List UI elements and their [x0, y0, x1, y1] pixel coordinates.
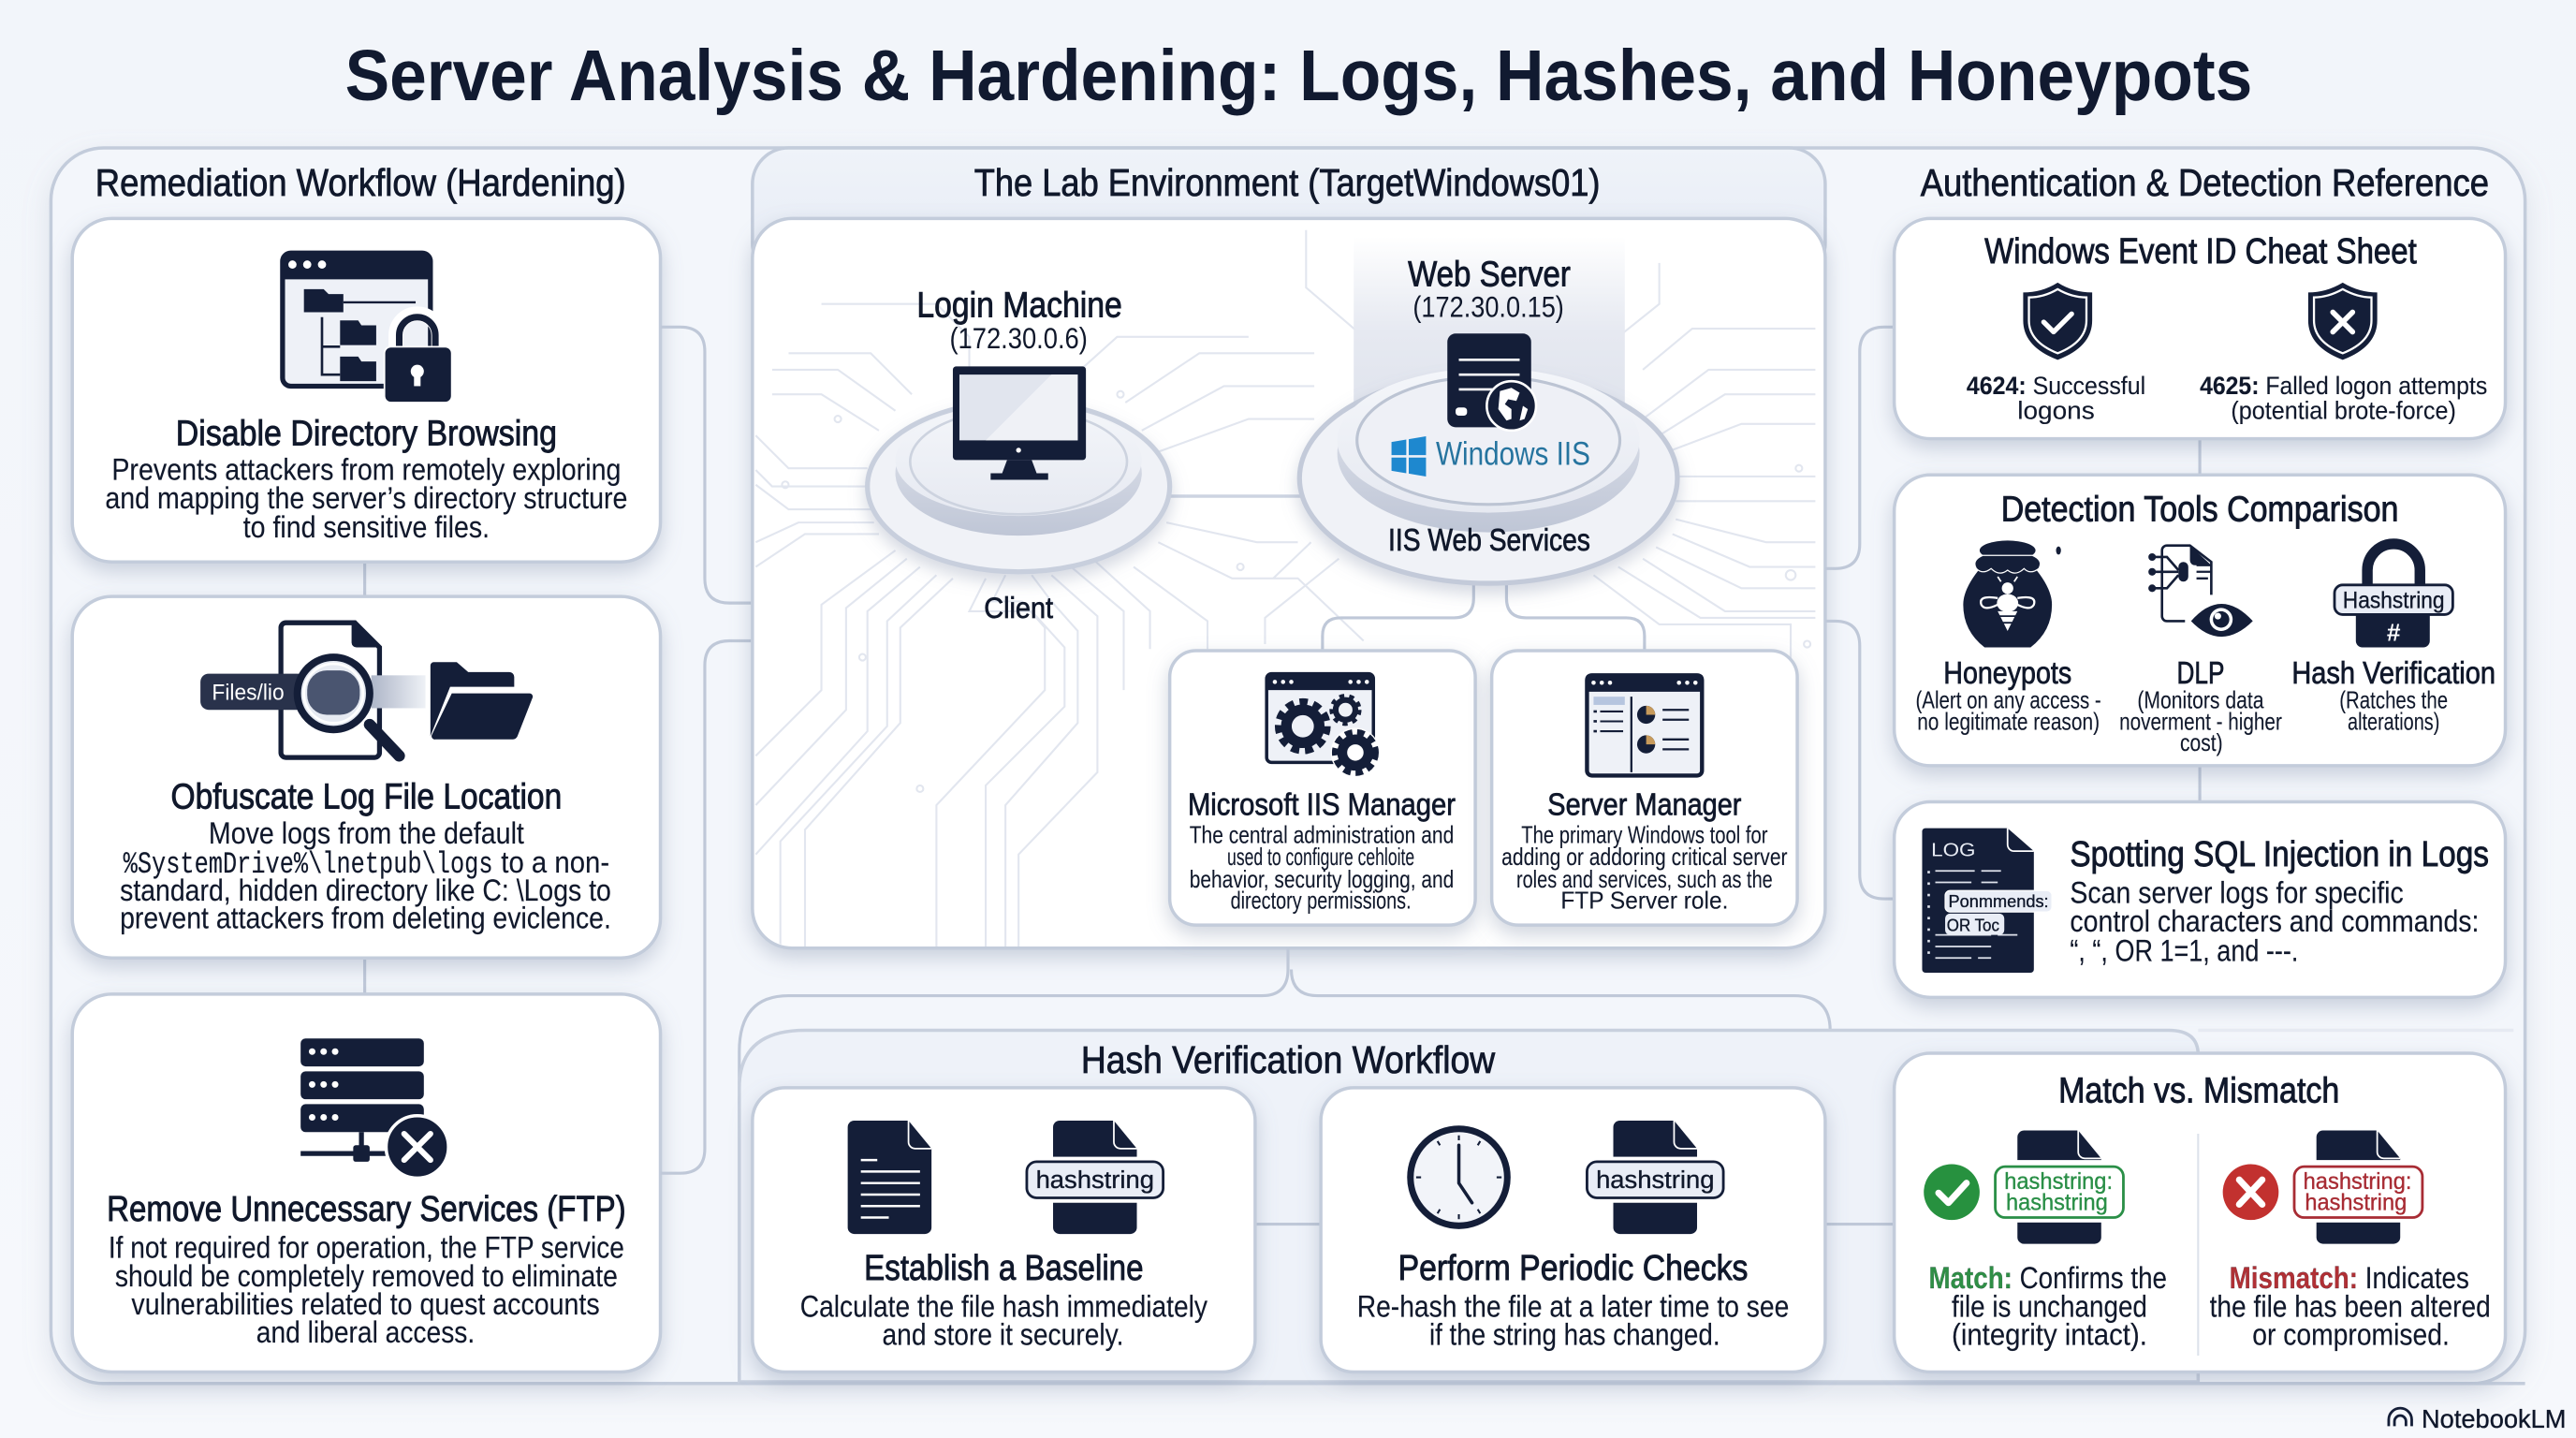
text block — [2070, 875, 2479, 968]
icon: hashstring document: hashstring — [1596, 1166, 1714, 1194]
card: spotting SQL injection — [1895, 801, 2506, 997]
icon: match — [1924, 1131, 2130, 1244]
text block: if the string has changed. — [1429, 1318, 1720, 1352]
card: detection tools comparison — [1895, 475, 2506, 766]
card: remove unnecessary services — [72, 994, 661, 1372]
panel: authentication and detection reference — [1895, 161, 2506, 997]
panel: hash verification workflow — [739, 1030, 2525, 1384]
icon: windows logo and IIS label — [1392, 436, 1590, 477]
text block: “, “, OR 1=1, and ---. — [2070, 934, 2298, 968]
heading: microsoft IIS manager: Microsoft IIS Manager — [1188, 788, 1456, 823]
divider — [2197, 1134, 2199, 1356]
text block — [1501, 822, 1788, 915]
heading: SQL injection: Spotting SQL Injection in Logs — [2070, 834, 2489, 873]
icon: hashstring document — [1584, 1121, 1725, 1234]
text block: The primary Windows tool for — [1521, 822, 1768, 848]
icon: hashstring document: hashstring — [1036, 1166, 1154, 1194]
icon: server stack with x — [300, 1038, 448, 1178]
server glow column — [1354, 237, 1625, 450]
icon: shield x — [2308, 283, 2378, 360]
text: DLP — [2119, 656, 2282, 756]
heading: authentication reference: Authentication & Detection Reference — [1921, 161, 2489, 204]
text: hash verification: Hash Verification — [2291, 656, 2496, 691]
title: Server Analysis & Hardening: Logs, Hashes, and Honeypots — [345, 36, 2252, 116]
text block: Re-hash the file at a later time to see — [1357, 1290, 1789, 1324]
platform: client — [868, 401, 1170, 572]
icon: mismatch — [2223, 1131, 2428, 1244]
text: DLP: noverment - higher — [2119, 709, 2282, 735]
machine label: login machine — [916, 286, 1122, 355]
machine label: web server: Web Server — [1408, 254, 1571, 293]
card: server manager — [1492, 651, 1797, 925]
machine label: web server — [1408, 254, 1571, 324]
text block: and liberal access. — [256, 1315, 475, 1349]
connector: card 1 to card 2 — [364, 562, 366, 596]
text: 4624 — [1967, 371, 2145, 425]
lab card — [753, 218, 1825, 948]
text block: Move logs from the default — [209, 816, 524, 850]
text block: standard, hidden directory like C: \Logs to — [120, 873, 611, 907]
text block — [800, 1290, 1208, 1352]
icon: directory window and lock — [283, 252, 452, 403]
text block — [109, 1231, 624, 1349]
connector: periodic to match — [1825, 1224, 1895, 1225]
text block: FTP Server role. — [1560, 888, 1728, 915]
icon: log file with magnifier and folder: Files/lio — [212, 682, 285, 706]
heading: hash workflow: Hash Verification Workflow — [1081, 1038, 1496, 1081]
text block: directory permissions. — [1231, 888, 1412, 915]
text: 4625: 4625: Falled logon attempts — [2200, 371, 2487, 400]
heading: event ID: Windows Event ID Cheat Sheet — [1984, 231, 2417, 271]
text block: %SystemDrive%\lnetpub\logs — [124, 847, 493, 882]
card: disable directory browsing — [72, 218, 661, 562]
connector: event to detection — [2199, 439, 2201, 475]
logo: NotebookLM: NotebookLM — [2422, 1404, 2566, 1433]
icon: hash lock: Hashstring — [2343, 588, 2445, 613]
text block: Prevents attackers from remotely exploring — [111, 452, 621, 486]
text: match — [1928, 1261, 2167, 1352]
text block: roles and services, such as the — [1516, 867, 1773, 893]
icon: window with gears — [1266, 674, 1380, 777]
text block: Calculate the file hash immediately — [800, 1290, 1208, 1324]
text: mismatch: Mismatch: Indicates — [2230, 1261, 2469, 1295]
connector: card 3 to lab — [661, 640, 753, 1173]
text: DLP: (Monitors data — [2137, 687, 2264, 713]
heading: server manager: Server Manager — [1547, 788, 1741, 823]
panel: remediation workflow — [72, 161, 661, 1372]
heading: establish a baseline: Establish a Baseline — [864, 1248, 1144, 1287]
text block: to a non- — [501, 845, 609, 879]
card: perform periodic checks — [1321, 1088, 1825, 1372]
label: IIS web services: IIS Web Services — [1388, 523, 1590, 558]
heading: remove unnecessary services: Remove Unnecessary Services (FTP) — [107, 1189, 626, 1228]
text: hash verification — [2291, 656, 2496, 735]
text: mismatch: or compromised. — [2252, 1318, 2450, 1352]
connector: lab to SQL card — [1825, 621, 1895, 899]
machine label: web server: (172.30.0.15) — [1412, 290, 1564, 324]
card: match vs mismatch — [1895, 1053, 2506, 1372]
heading: perform periodic checks: Perform Periodic Checks — [1398, 1248, 1748, 1287]
icon: match: hashstring — [2006, 1191, 2108, 1216]
text block — [1357, 1290, 1789, 1352]
text: honeypots: (Alert on any access - — [1915, 687, 2101, 713]
text: DLP: cost) — [2180, 730, 2223, 756]
heading: disable directory browsing: Disable Directory Browsing — [176, 414, 557, 453]
text block: should be completely removed to eliminate — [115, 1259, 618, 1293]
icon: match: hashstring: — [2004, 1169, 2113, 1195]
connector: client to server — [1166, 495, 1301, 497]
text: hash verification: (Ratches the — [2339, 687, 2448, 713]
text: 4625: (potential brote-force) — [2231, 396, 2456, 425]
icon: hashstring document — [1025, 1121, 1164, 1234]
heading: obfuscate log file location: Obfuscate Log File Location — [171, 777, 562, 816]
decorative circuit traces — [755, 230, 1815, 946]
text: 4624: logons — [2017, 396, 2095, 425]
icon: log document — [1922, 829, 2052, 973]
text block: used to configure cehloite — [1227, 844, 1414, 871]
connector: event card to lab — [1825, 327, 1895, 568]
text: match: Match: Confirms the — [1928, 1261, 2167, 1295]
icon: DLP — [2148, 546, 2254, 638]
text block: control characters and commands: — [2070, 904, 2479, 938]
icon: log document: OR Toc — [1947, 915, 1999, 934]
icon: log document: Ponmmends: — [1949, 891, 2049, 911]
text: honeypots: Honeypots — [1943, 656, 2071, 691]
label: client: Client — [984, 591, 1053, 624]
icon: honeypot — [1963, 540, 2061, 648]
icon: dashboard window — [1586, 674, 1704, 775]
text block: prevent attackers from deleting eviclence. — [120, 902, 611, 935]
icon: hash lock — [2334, 544, 2452, 648]
text block — [105, 452, 627, 544]
text block: The central administration and — [1190, 822, 1454, 848]
connector: card 2 to card 3 — [364, 958, 366, 994]
text: mismatch: the file has been altered — [2210, 1290, 2491, 1324]
text: match: (integrity intact). — [1952, 1318, 2147, 1352]
connector: server to tools — [1323, 579, 1645, 651]
text block: adding or addoring critical server — [1501, 844, 1788, 871]
icon: mismatch: hashstring — [2305, 1191, 2407, 1216]
icon: clock — [1411, 1129, 1507, 1225]
icon: server with globe — [1447, 333, 1536, 431]
heading: lab environment: The Lab Environment (TargetWindows01) — [974, 161, 1600, 204]
text: 4625 — [2200, 371, 2487, 425]
platform: server — [1299, 368, 1677, 583]
text block: to find sensitive files. — [243, 510, 490, 544]
heading: remediation: Remediation Workflow (Hardening) — [95, 161, 626, 204]
text block: and mapping the server’s directory structure — [105, 481, 627, 515]
icon: hash lock: # — [2387, 618, 2401, 646]
connector: baseline to periodic — [1255, 1224, 1321, 1225]
text: 4624: 4624: Successful — [1967, 371, 2145, 400]
card: establish a baseline — [753, 1088, 1255, 1372]
machine label: login machine: Login Machine — [916, 286, 1122, 325]
heading: match vs mismatch: Match vs. Mismatch — [2058, 1071, 2339, 1110]
text block: Scan server logs for specific — [2070, 875, 2404, 909]
text: match: file is unchanged — [1952, 1290, 2147, 1324]
icon: mismatch: hashstring: — [2304, 1169, 2411, 1195]
text: mismatch — [2210, 1261, 2491, 1352]
connector: detection to SQL — [2199, 766, 2201, 801]
text: DLP: DLP — [2177, 656, 2224, 691]
panel: lab environment — [753, 148, 1825, 948]
text: honeypots — [1915, 656, 2101, 735]
text block: and store it securely. — [882, 1318, 1123, 1352]
card: windows event ID cheat sheet — [1895, 218, 2506, 439]
icon: log file with magnifier and folder — [200, 623, 533, 757]
connector: card 1 to lab — [661, 327, 753, 603]
icon: shield check — [2023, 283, 2092, 360]
text: hash verification: alterations) — [2348, 709, 2439, 735]
card: microsoft IIS manager — [1170, 651, 1475, 925]
text block: If not required for operation, the FTP service — [109, 1231, 624, 1265]
text block — [120, 816, 611, 935]
icon: log document: LOG — [1931, 840, 1976, 860]
card: obfuscate log file location — [72, 596, 661, 958]
heading: detection tools: Detection Tools Comparison — [2001, 489, 2398, 528]
text: honeypots: no legitimate reason) — [1917, 709, 2100, 735]
text block — [1190, 822, 1454, 915]
connector: lab to hash workflow — [739, 948, 1830, 1084]
text block: behavior, security logging, and — [1190, 867, 1454, 893]
text block: vulnerabilities related to quest accounts — [131, 1287, 600, 1321]
icon: monitor — [953, 366, 1086, 479]
machine label: login machine: (172.30.0.6) — [949, 321, 1088, 355]
icon: windows logo and IIS label: Windows IIS — [1436, 436, 1590, 473]
icon: document — [848, 1121, 931, 1234]
